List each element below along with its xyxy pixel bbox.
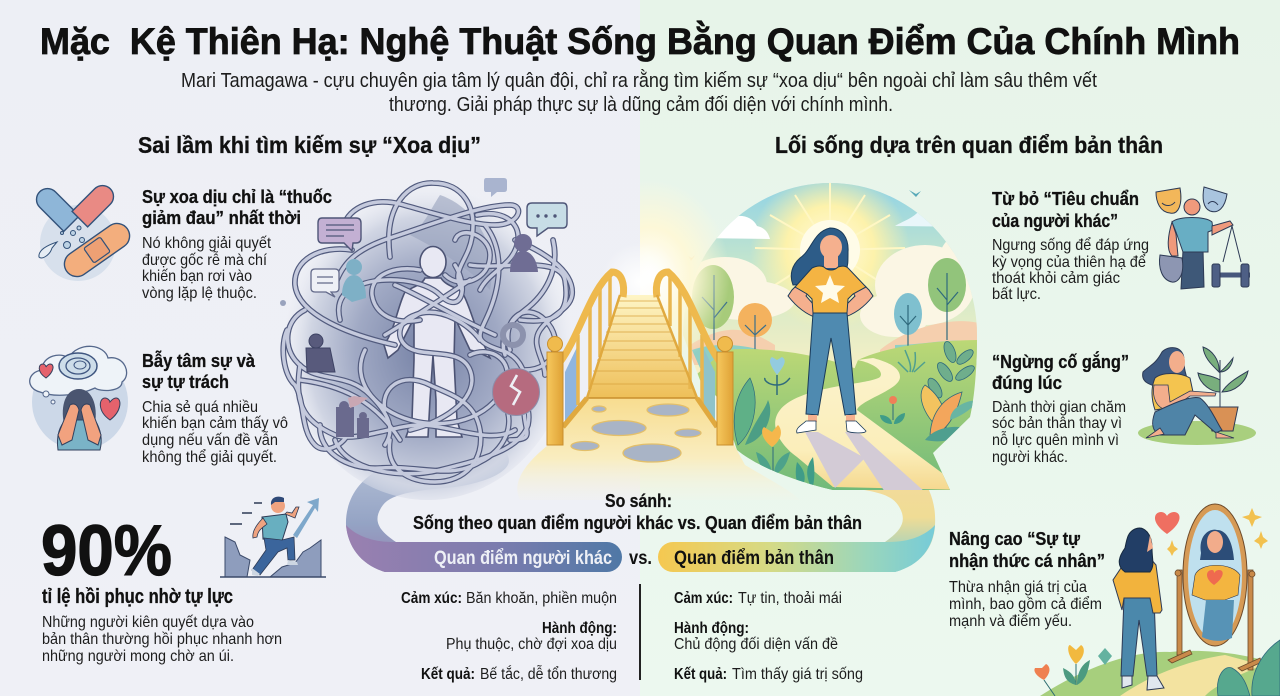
orange tree — [738, 303, 772, 350]
heading and text: calming is a painkiller — [142, 186, 332, 302]
versus label: vs. — [629, 548, 652, 569]
woman seen from behind — [1113, 528, 1164, 690]
comparison divider — [639, 584, 641, 680]
heading and text: confiding trap: khiến bạn cảm thấy vô — [142, 415, 288, 432]
illustration: sunny scene — [683, 183, 977, 490]
heading and text: drop others' standards: kỳ vọng của thiên hạ để — [992, 253, 1146, 271]
speech bubble: faint — [484, 178, 507, 197]
comparison column: own view: Kết quả: — [674, 666, 727, 683]
stat: 90 percent: những người mong chờ an úi. — [42, 648, 234, 665]
heading: left section: Sai lầm khi tìm kiếm sự “Xoa dịu” — [138, 132, 481, 158]
subtitle: Mari Tamagawa - cựu chuyên gia tâm lý quân đội, chỉ ra rằng tìm kiếm sự “xoa dịu“ bên ngoài chỉ làm sâu thêm vết — [181, 69, 1097, 92]
green hills — [698, 349, 854, 490]
comparison column: own view: Cảm xúc: — [674, 590, 733, 607]
heading and text: confiding trap: Chia sẻ quá nhiều — [142, 399, 258, 416]
sparkles — [1167, 508, 1268, 556]
heading and text: drop others' standards: Từ bỏ “Tiêu chuẩn — [992, 188, 1139, 209]
heading and text: drop others' standards: bất lực. — [992, 286, 1041, 303]
woman with star — [788, 228, 873, 433]
comparison column: others' view: Phụ thuộc, chờ đợi xoa dịu — [446, 636, 617, 653]
comparison heading: So sánh: — [605, 491, 672, 511]
heading and text: self awareness: Nâng cao “Sự tự — [949, 528, 1081, 549]
comparison heading: Sống theo quan điểm người khác vs. Quan điểm bản thân — [413, 513, 862, 533]
icon: masks and dumbbell — [1156, 187, 1250, 289]
bottom right leaves — [1217, 640, 1280, 696]
heading and text: drop others' standards — [992, 188, 1149, 303]
pill: others' view — [346, 525, 622, 572]
speech bubble: purple — [318, 218, 361, 251]
comparison column: own view: Tìm thấy giá trị sống — [732, 666, 863, 683]
icon: crying woman with thought cloud — [30, 346, 128, 450]
heart — [1155, 512, 1180, 534]
subtitle: thương. Giải pháp thực sự là dũng cảm đối diện với chính mình. — [389, 94, 893, 116]
tangle shadow blob — [283, 170, 573, 500]
heading: right section: Lối sống dựa trên quan điểm bản thân — [775, 132, 1163, 158]
stat: 90 percent: bản thân thường hồi phục nhanh hơn — [42, 631, 282, 648]
stat: 90 percent: tỉ lệ hồi phục nhờ tự lực — [42, 586, 233, 608]
icon: woman caring for a plant — [1138, 347, 1256, 445]
hill — [1040, 651, 1280, 696]
heading and text: confiding trap: dụng nếu vấn đề vẫn — [142, 430, 278, 449]
tangled tube lines — [283, 183, 572, 482]
comparison column: others' view: Băn khoăn, phiền muộn — [466, 590, 617, 607]
subtitle — [181, 69, 1097, 116]
heading and text: self awareness: mình, bao gồm cả điểm — [949, 595, 1102, 613]
woman's shadow — [805, 432, 925, 492]
pill: own view: Quan điểm bản thân — [674, 548, 834, 569]
blue tree — [894, 293, 922, 347]
heading and text: confiding trap: sự tự trách — [142, 371, 229, 392]
bird: left — [688, 255, 695, 261]
swoosh band: left — [346, 452, 509, 572]
heading and text: calming is a painkiller: khiến bạn rơi vào — [142, 268, 252, 285]
heading and text: stop trying: Dành thời gian chăm — [992, 399, 1126, 416]
comparison column: others' view: Cảm xúc: — [401, 590, 462, 607]
heading and text: stop trying: nỗ lực quên mình vì — [992, 430, 1119, 449]
comparison column: others' view: Hành động: — [542, 620, 617, 637]
comparison column: own view: Tự tin, thoải mái — [738, 590, 842, 607]
heading and text: self awareness: mạnh và điểm yếu. — [949, 612, 1072, 630]
comparison column: own view — [674, 590, 863, 683]
stat: 90 percent: 90% — [41, 512, 172, 591]
pill: others' view: Quan điểm người khác — [434, 548, 612, 569]
heading and text: self awareness — [949, 528, 1105, 630]
heading and text: calming is a painkiller: vòng lặp lệ thuộc. — [142, 285, 257, 302]
heading and text: stop trying: sóc bản thân thay vì — [992, 415, 1122, 432]
heading and text: calming is a painkiller: được gốc rễ mà chí — [142, 250, 267, 269]
illustration: tangled mind — [280, 170, 573, 500]
person silhouette: top right — [510, 234, 538, 272]
heading and text: calming is a painkiller: Nó không giải quyết — [142, 235, 271, 252]
title: Mặc Kệ Thiên Hạ: Nghệ Thuật Sống Bằng Quan Điểm Của Chính Mình — [40, 20, 1240, 62]
central person — [384, 246, 490, 437]
heading and text: confiding trap: không thể giải quyết. — [142, 448, 277, 466]
comparison column: own view: Chủ động đối diện vấn đề — [674, 636, 838, 653]
gear — [503, 325, 523, 345]
hill path — [1120, 655, 1262, 696]
comparison column: others' view: Kết quả: — [421, 666, 475, 683]
plants: left — [734, 357, 814, 490]
white clouds — [716, 212, 932, 239]
far hills — [690, 321, 985, 370]
winding path — [775, 358, 965, 490]
heading and text: stop trying: đúng lúc — [992, 372, 1062, 393]
mirror — [1183, 504, 1247, 646]
comparison column: others' view: Bế tắc, dễ tổn thương — [480, 666, 617, 683]
heading and text: self awareness: Thừa nhận giá trị của — [949, 579, 1087, 596]
heading and text: self awareness: nhận thức cá nhân” — [949, 550, 1105, 571]
left tree — [692, 265, 734, 340]
person group — [336, 396, 369, 438]
speech bubble: white — [311, 269, 339, 297]
icon: runner climbing rocks — [220, 497, 326, 577]
heading and text: stop trying: người khác. — [992, 449, 1068, 466]
broken heart disc — [492, 368, 540, 416]
heading and text: drop others' standards: Ngưng sống để đáp ứng — [992, 236, 1149, 254]
swoosh band: right — [768, 450, 935, 572]
person silhouette: dark — [306, 334, 335, 372]
heading and text: confiding trap — [142, 350, 288, 466]
sun — [754, 183, 906, 318]
mirror stand — [1168, 570, 1262, 671]
heading and text: confiding trap: Bẫy tâm sự và — [142, 350, 256, 371]
comparison heading — [413, 491, 862, 533]
heading and text: calming is a painkiller: Sự xoa dịu chỉ là “thuốc — [142, 186, 332, 207]
plants: right — [880, 340, 980, 441]
comparison column: others' view — [401, 590, 617, 683]
background: left half — [0, 0, 640, 696]
heading and text: drop others' standards: thoát khỏi cảm giác — [992, 270, 1120, 287]
background: right half — [640, 0, 1280, 696]
dot — [280, 300, 286, 306]
bird: top — [909, 190, 921, 197]
illustration: woman at mirror — [1034, 504, 1280, 696]
right tree — [928, 258, 966, 340]
cream clouds — [696, 242, 972, 337]
pill: own view — [658, 525, 935, 572]
icon: pills and bandage — [32, 181, 134, 281]
comparison column: own view: Hành động: — [674, 620, 749, 637]
stat: 90 percent — [41, 512, 282, 665]
illustration: golden bridge — [547, 272, 733, 445]
illustration: bridge floor and glow — [517, 180, 800, 500]
stat: 90 percent: Những người kiên quyết dựa vào — [42, 614, 254, 631]
heading and text: stop trying — [992, 351, 1129, 466]
heading and text: calming is a painkiller: giảm đau” nhất thời — [142, 207, 301, 228]
speech bubble: teal — [527, 203, 567, 236]
person silhouette: blue — [342, 259, 366, 302]
flowers — [1034, 645, 1112, 696]
sky — [680, 180, 990, 380]
stepping stones — [571, 404, 701, 462]
heading and text: stop trying: “Ngừng cố gắng” — [992, 351, 1129, 372]
heading and text: drop others' standards: của người khác” — [992, 210, 1118, 231]
